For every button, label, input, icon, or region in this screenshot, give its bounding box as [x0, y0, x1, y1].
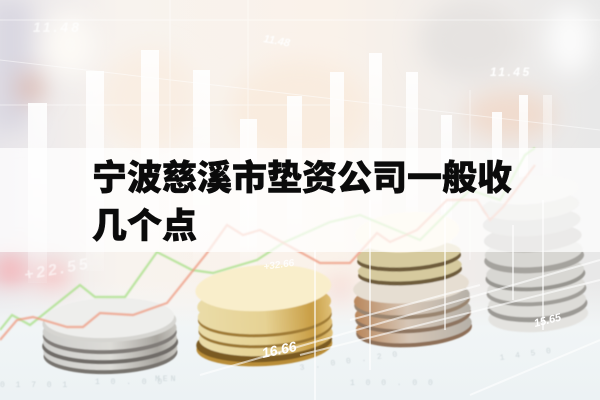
- coin stack 4: silver: [479, 173, 589, 335]
- bar value labels: [23, 19, 532, 284]
- printed paper figures: 3 . 0 0 . 2 0: [299, 350, 401, 373]
- printed paper figures: 1 0 . 0 0: [95, 378, 165, 387]
- coin stack 2: gold: [192, 262, 335, 370]
- white chart bars: [28, 50, 552, 283]
- bar value labels: 11.48: [262, 33, 292, 50]
- overlay streaks across coins: [200, 200, 600, 400]
- paper with printed figures: [0, 280, 600, 400]
- coin value labels: [260, 258, 563, 361]
- blurred background bokeh: [0, 0, 594, 313]
- coin value labels: 15.65: [533, 311, 563, 330]
- printed paper figures: [0, 346, 554, 390]
- title: 宁波慈溪市垫资公司一般收几个点: [92, 159, 512, 246]
- bar value labels: 11.48: [33, 19, 82, 35]
- bar value labels: 11.45: [490, 65, 532, 79]
- coin stack 1: silver: [41, 296, 179, 376]
- printed paper figures: 0 1 7 0 1: [0, 381, 70, 390]
- printed paper figures: MEN: [155, 375, 178, 384]
- green line chart: [0, 148, 535, 330]
- printed paper figures: 1 0 0 . 0 0: [350, 379, 436, 388]
- coin stack 3: gold and copper: [348, 208, 473, 351]
- coin value labels: 16.66: [260, 338, 298, 361]
- red line chart: [0, 165, 535, 340]
- coin value labels: +32.66: [263, 258, 295, 273]
- title band: [0, 148, 600, 252]
- printed paper figures: 1 4 5 0: [499, 346, 554, 363]
- bar value labels: +22.55: [23, 255, 92, 284]
